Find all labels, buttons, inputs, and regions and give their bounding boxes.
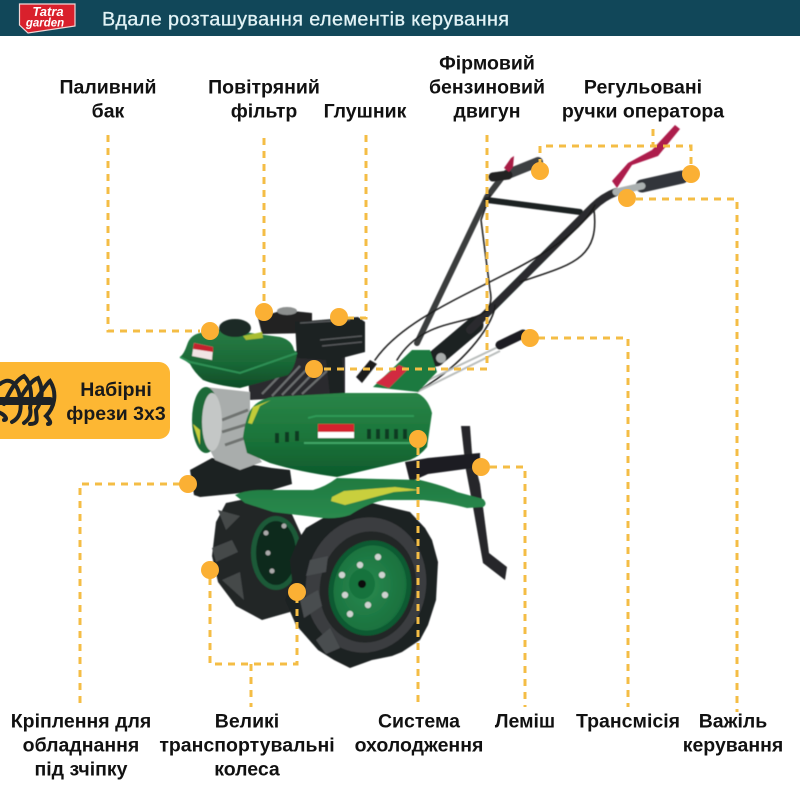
label: fuel tank: Паливний [60, 76, 156, 98]
handle pivot bolt [436, 353, 446, 363]
green handle bracket [373, 350, 437, 392]
label: branded engine: бензиновий [429, 76, 545, 98]
label: cooling system: охолодження [355, 734, 483, 756]
label: air filter: фільтр [231, 100, 297, 122]
logo: Tatra garden: garden [25, 18, 64, 30]
label: control lever: керування [683, 734, 783, 756]
label: transmission: Трансмісія [576, 710, 680, 732]
rear frame bar [405, 453, 480, 482]
dashed leader lines and marker dots [80, 129, 737, 712]
label: branded engine: двигун [453, 100, 521, 122]
fuel tank [180, 319, 297, 388]
right red lever [612, 125, 680, 188]
leader: plow [472, 458, 525, 707]
label: fuel tank: бак [92, 100, 125, 122]
leader: cooling system [409, 430, 427, 707]
callout text: Набірні [80, 379, 152, 401]
handlebar frame [375, 162, 682, 390]
leader: air filter [255, 138, 273, 321]
header bar [0, 0, 800, 36]
control rods and knob [416, 334, 523, 392]
fender [235, 478, 486, 518]
label: branded engine: Фірмовий [439, 52, 535, 74]
choke lever [356, 360, 377, 383]
leader: adjustable handles [531, 129, 700, 183]
leader: transmission [521, 329, 628, 707]
tiller illustration [180, 125, 682, 668]
leader: transport wheels [201, 561, 306, 707]
label: hitch mount: під зчіпку [34, 758, 128, 780]
leader: control lever [618, 189, 737, 712]
label: hitch mount: обладнання [23, 734, 139, 756]
label: transport wheels: колеса [214, 758, 280, 780]
leader: engine [305, 135, 487, 378]
red warning sticker [376, 365, 408, 388]
leader: muffler [330, 135, 366, 326]
rear wheel [212, 498, 306, 620]
callout: cutter set [0, 362, 170, 439]
muffler [295, 317, 365, 395]
title: Вдале розташування елементів керування [102, 8, 509, 30]
label: air filter: Повітряний [208, 76, 320, 98]
callout text: фрези 3х3 [66, 403, 166, 425]
label: cooling system: Система [378, 710, 460, 732]
label: transport wheels: транспортувальні [159, 734, 335, 756]
label: adjustable handles: ручки оператора [562, 100, 724, 122]
logo: Tatra garden: Tatra [32, 4, 64, 19]
engine block [192, 350, 345, 470]
ripper blade [461, 426, 507, 580]
leader: hitch mount [80, 475, 197, 707]
label: plow: Леміш [495, 710, 555, 732]
label: transport wheels: Великі [215, 710, 279, 732]
front wheel [285, 503, 439, 668]
label: control lever: Важіль [699, 710, 767, 732]
left red lever [504, 156, 514, 172]
leader: fuel tank [108, 135, 219, 340]
air filter [258, 307, 312, 334]
front hitch frame [190, 458, 292, 497]
icon: tiller cutters [0, 376, 54, 424]
label: muffler: Глушник [324, 100, 407, 122]
label: adjustable handles: Регульовані [584, 76, 702, 98]
fender sticker [331, 487, 420, 505]
label: hitch mount: Кріплення для [11, 710, 151, 732]
logo: Tatra garden [20, 4, 75, 33]
transmission cover [243, 393, 432, 477]
